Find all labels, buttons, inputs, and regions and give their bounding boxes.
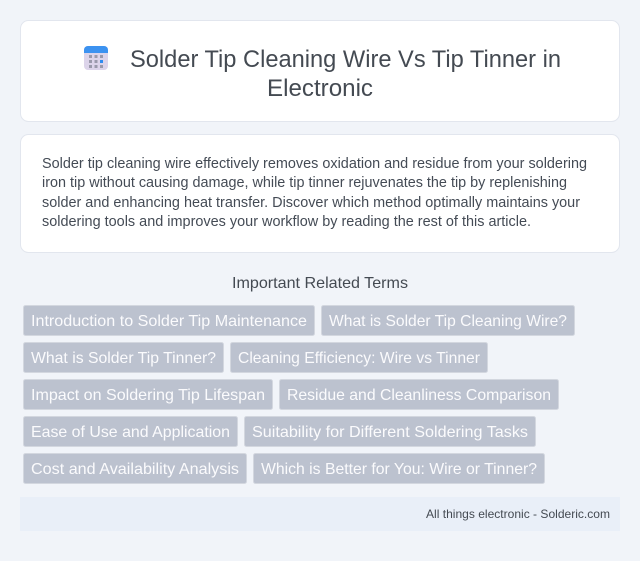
tag: Suitability for Different Soldering Tasks [252,424,528,441]
tag: Introduction to Solder Tip Maintenance [31,313,307,330]
panel: title card [20,20,620,122]
text block: description: solder and enhancing heat transfer. Discover which method optimally maintains your [42,195,580,211]
tag [322,306,574,336]
tag: Which is Better for You: Wire or Tinner? [261,461,537,478]
heading: related terms: Important Related Terms [232,275,408,292]
tag [24,380,272,410]
tag [230,342,488,372]
tag [24,306,314,336]
text block: description: soldering tools and improves your workflow by reading the rest of this article. [42,214,531,230]
text block: description: iron tip without causing damage, while tip tinner rejuvenates the tip by replenishing [42,175,567,191]
title: Solder Tip Cleaning Wire Vs Tip Tinner in [130,46,561,73]
tag: What is Solder Tip Tinner? [31,350,216,367]
title: Electronic [267,75,373,102]
tag [24,454,246,484]
tag [254,454,544,484]
tag: Residue and Cleanliness Comparison [287,387,551,404]
tag: Impact on Soldering Tip Lifespan [31,387,265,404]
tag [24,416,238,446]
text block: description: Solder tip cleaning wire effectively removes oxidation and residue from your soldering [42,156,587,172]
tag [280,380,558,410]
tag [244,416,536,446]
tag [24,342,224,372]
panel: description [20,134,620,252]
title [130,46,561,102]
tag: What is Solder Tip Cleaning Wire? [329,313,567,330]
panel: term tags [24,306,574,484]
icon: calendar [84,46,108,70]
footer [20,497,620,531]
text block: description [42,156,587,230]
tag: Cost and Availability Analysis [31,461,239,478]
tag: Cleaning Efficiency: Wire vs Tinner [238,350,481,367]
footer: All things electronic - Solderic.com [426,507,610,521]
tag: Ease of Use and Application [31,424,230,441]
